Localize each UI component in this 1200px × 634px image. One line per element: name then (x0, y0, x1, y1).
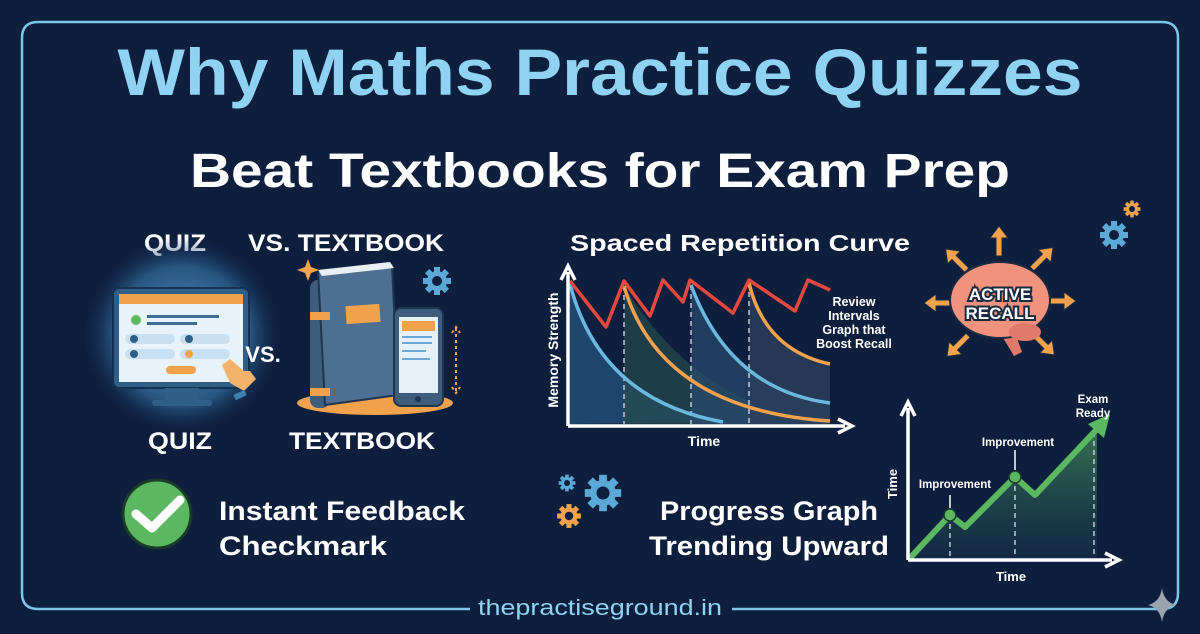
chart: spaced repetition curve: Time (688, 433, 720, 449)
subtitle: Beat Textbooks for Exam Prep (190, 145, 1010, 198)
text: instant feedback: Instant Feedback (219, 496, 466, 526)
chart: spaced repetition curve (545, 230, 910, 449)
callout: review intervals: Graph that (822, 323, 886, 337)
icon: gears bottom (557, 475, 621, 528)
callout: review intervals: Review (832, 295, 876, 309)
text: progress graph: Progress Graph (660, 496, 878, 526)
label: quiz: QUIZ (148, 428, 212, 455)
chart: progress graph (885, 394, 1119, 584)
chart: progress graph: Improvement (982, 437, 1054, 449)
chart: progress graph: Time (885, 469, 900, 499)
icon: checkmark (123, 480, 191, 548)
title: Why Maths Practice Quizzes (118, 35, 1082, 109)
label: textbook: TEXTBOOK (289, 428, 436, 455)
footer url: thepractiseground.in (478, 595, 722, 620)
icon: quiz monitor (84, 237, 280, 433)
text: progress graph (649, 496, 889, 561)
chart title: Spaced Repetition Curve (570, 230, 910, 256)
icon: active recall brain (924, 226, 1076, 363)
panel: quiz vs textbook (84, 230, 460, 455)
heading: vs textbook: VS. TEXTBOOK (248, 230, 445, 257)
chart: progress graph: Exam (1078, 394, 1108, 406)
chart: progress graph: Ready (1076, 408, 1111, 420)
callout: review intervals (816, 295, 892, 351)
icon: active recall brain: ACTIVE (969, 285, 1031, 304)
text: instant feedback (219, 496, 466, 561)
heading: quiz: QUIZ (144, 230, 206, 257)
text: instant feedback: Checkmark (219, 531, 388, 561)
chart: progress graph: Time (996, 569, 1026, 584)
icon: gears top right (1100, 201, 1140, 249)
callout: review intervals: Intervals (828, 309, 880, 323)
callout: review intervals: Boost Recall (816, 337, 892, 351)
icon: sparkle (1148, 588, 1176, 622)
text: progress graph: Trending Upward (649, 531, 889, 561)
chart: progress graph: Improvement (919, 479, 991, 491)
text: vs: VS. (245, 342, 281, 367)
icon: textbook and phone (297, 259, 460, 415)
icon: active recall brain: RECALL (966, 304, 1034, 323)
chart: spaced repetition curve: Memory Strength (545, 292, 561, 408)
